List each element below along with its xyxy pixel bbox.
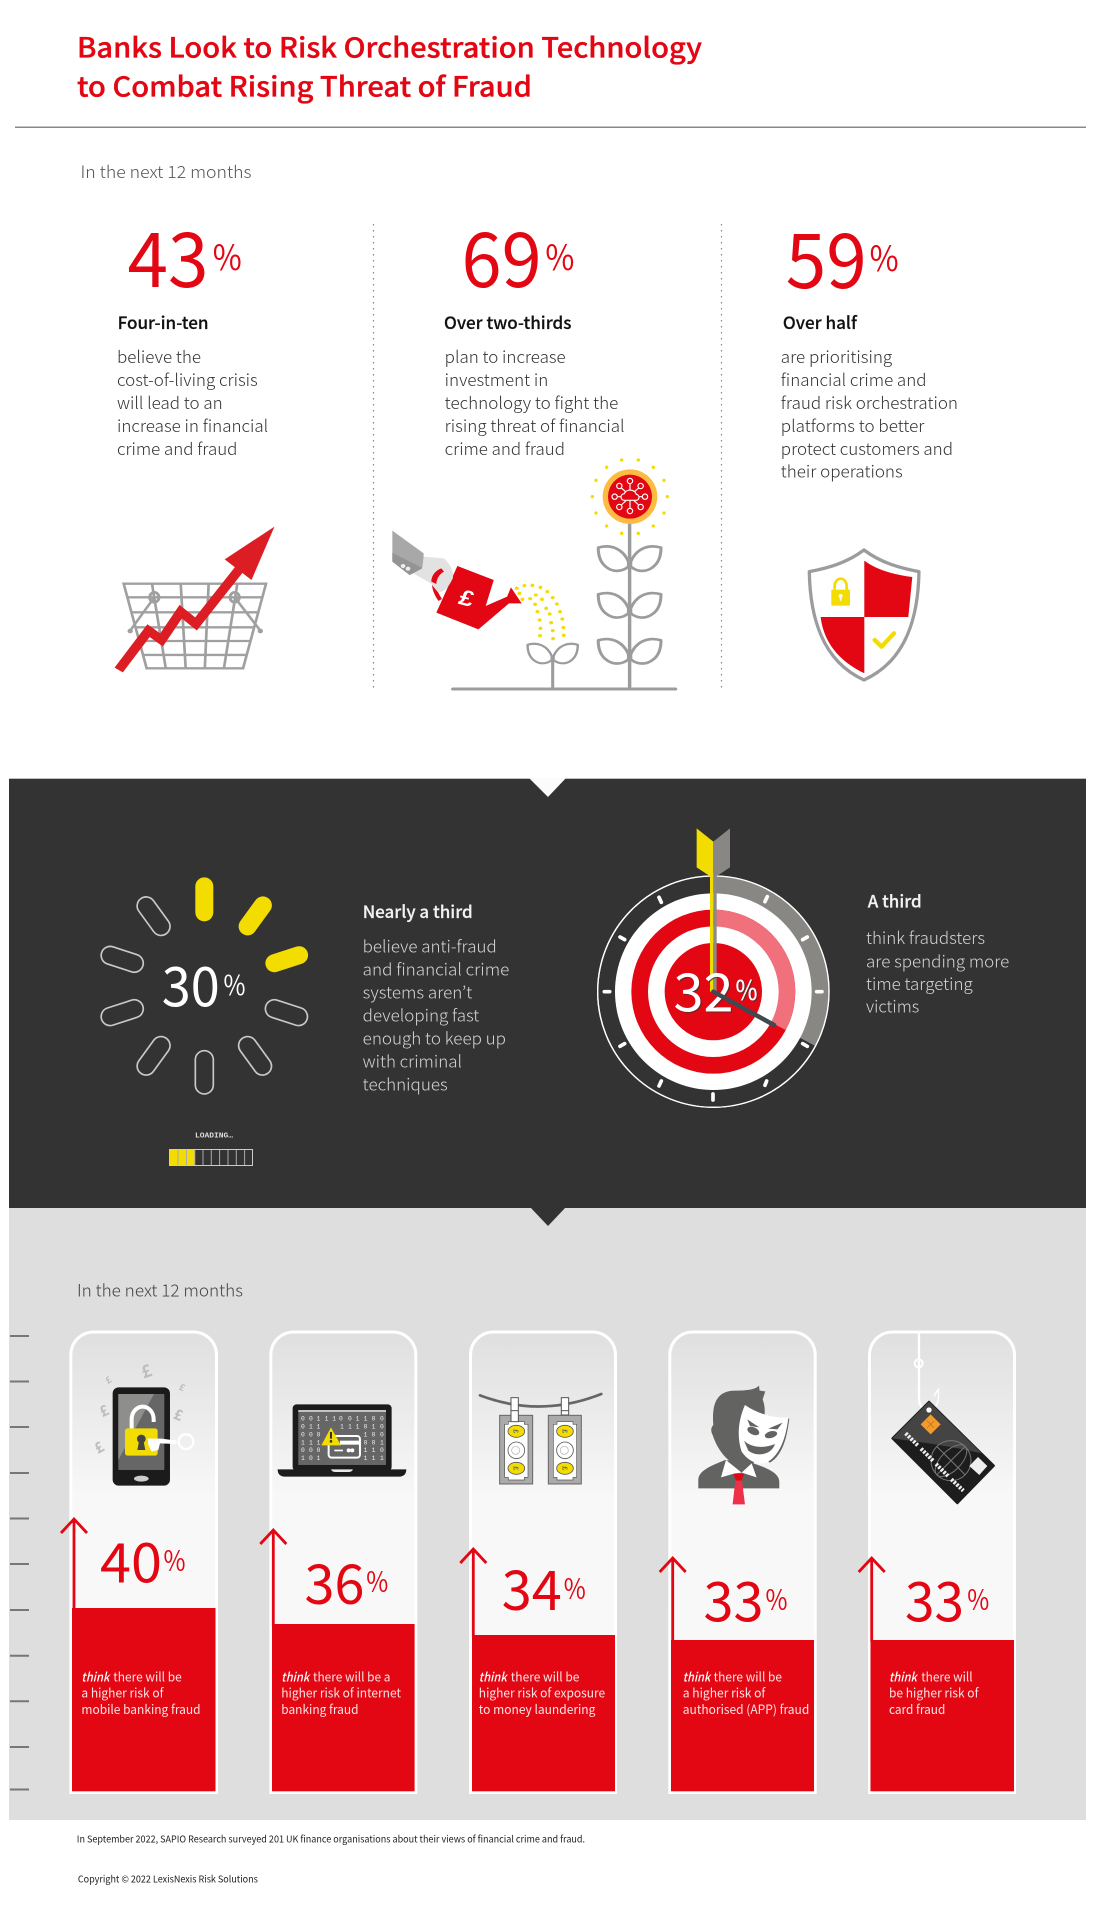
stat 36%: % xyxy=(366,1561,388,1600)
caption: a higher risk of xyxy=(683,1683,766,1702)
icon: laptop with binary and alert: 0 xyxy=(380,1416,384,1423)
caption xyxy=(281,1667,401,1718)
ground line xyxy=(453,684,676,693)
stat 59%: % xyxy=(870,231,899,282)
icon: laptop with binary and alert: 0 xyxy=(339,1416,343,1423)
icon: flower with network node head xyxy=(591,458,669,535)
panel: dark survey band xyxy=(9,778,1086,1226)
caption xyxy=(479,1667,605,1718)
red bar 33 percent xyxy=(870,1640,1014,1791)
caption: think xyxy=(479,1667,508,1686)
arrow up xyxy=(460,1549,486,1637)
panel: money laundering card xyxy=(460,1332,616,1792)
body text: and financial crime xyxy=(363,956,509,980)
red bar 36 percent xyxy=(272,1624,415,1791)
body text xyxy=(781,344,958,482)
icon: banknotes on washing line: £ xyxy=(560,1466,569,1470)
clock hand xyxy=(713,992,774,1025)
icon: laptop with binary and alert: 0 xyxy=(380,1424,384,1431)
icon: laptop with binary and alert: 1 xyxy=(317,1440,321,1447)
body text: with criminal xyxy=(363,1048,462,1072)
target dial chart with arrow xyxy=(598,828,829,1107)
body text: developing fast xyxy=(363,1002,479,1026)
icon: laptop with binary and alert: 0 xyxy=(348,1416,352,1423)
body text: time targeting xyxy=(866,971,973,995)
loading spinner chart xyxy=(99,877,310,1094)
icon: laptop with binary and alert: 1 xyxy=(356,1424,360,1431)
caption: higher risk of internet xyxy=(281,1683,401,1702)
caption: authorised (APP) fraud xyxy=(683,1699,809,1718)
loading bar: LOADING… xyxy=(195,1132,234,1140)
icon: laptop with binary and alert: 0 xyxy=(372,1440,376,1447)
body text: believe anti-fraud xyxy=(363,934,497,958)
icon: shopping basket with rising arrow xyxy=(119,527,274,670)
caption: there will xyxy=(921,1667,973,1686)
stat 69%: 69 xyxy=(462,199,542,309)
body text: fraud risk orchestration xyxy=(781,390,958,414)
section label: in the next 12 months (lower): In the next 12 months xyxy=(77,1277,243,1302)
icon: laptop with binary and alert: 1 xyxy=(309,1424,313,1431)
icon: laptop with binary and alert: 1 xyxy=(372,1455,376,1462)
icon: laptop with binary and alert: 0 xyxy=(301,1447,305,1454)
body text: platforms to better xyxy=(781,413,924,437)
body text: are spending more xyxy=(866,948,1009,972)
icon: banknotes on washing line xyxy=(480,1394,601,1484)
body text xyxy=(117,344,268,460)
stat 34%: 34 xyxy=(502,1546,562,1626)
title xyxy=(77,26,702,104)
icon: laptop with binary and alert: 1 xyxy=(380,1455,384,1462)
heading: a third: A third xyxy=(868,888,922,913)
stat 43%: 43 xyxy=(128,199,208,309)
body text: believe the xyxy=(117,344,201,368)
caption: think xyxy=(281,1667,311,1686)
icon: laptop with binary and alert: 1 xyxy=(372,1447,376,1454)
panel: over two-thirds stat xyxy=(392,199,676,689)
icon: phone with padlock and key: £ xyxy=(171,1403,186,1426)
progress wedge outer xyxy=(713,876,829,1046)
stat 40%: % xyxy=(164,1540,186,1579)
body text: investment in xyxy=(445,367,548,391)
stat 40%: 40 xyxy=(100,1519,162,1599)
icon: laptop with binary and alert: 0 xyxy=(317,1432,321,1439)
icon: laptop with binary and alert: 1 xyxy=(301,1440,305,1447)
panel: authorised APP fraud card xyxy=(660,1332,815,1792)
caption: think xyxy=(683,1667,712,1686)
caption: mobile banking fraud xyxy=(81,1699,201,1718)
panel: internet banking fraud card xyxy=(260,1332,416,1792)
stat 33%: % xyxy=(967,1578,989,1617)
stat 33%: 33 xyxy=(905,1558,964,1638)
icon: shield with padlock and tick xyxy=(809,550,919,680)
icon: laptop with binary and alert: 1 xyxy=(348,1424,352,1431)
body text: rising threat of financial xyxy=(445,413,625,437)
title: Banks Look to Risk Orchestration Technology xyxy=(77,26,702,66)
icon: laptop with binary and alert: 1 xyxy=(340,1424,344,1431)
red bar 40 percent xyxy=(72,1608,216,1791)
caption: be higher risk of xyxy=(889,1683,979,1702)
heading: over half: Over half xyxy=(783,309,858,334)
stat 43%: % xyxy=(213,230,242,281)
icon: laptop with binary and alert: 1 xyxy=(309,1440,313,1447)
caption: there will be xyxy=(714,1667,782,1686)
icon: phone with padlock and key: £ xyxy=(96,1399,113,1422)
panel: light grey bottom background xyxy=(9,1208,1086,1820)
body text: plan to increase xyxy=(445,344,566,368)
title: to Combat Rising Threat of Fraud xyxy=(77,64,532,104)
body text: victims xyxy=(866,994,919,1018)
sleeve and hand xyxy=(392,531,453,593)
section label: in the next 12 months: In the next 12 months xyxy=(80,158,252,183)
caption: higher risk of exposure xyxy=(479,1683,605,1702)
icon: laptop with binary and alert: 0 xyxy=(301,1432,305,1439)
icon: laptop with binary and alert: 0 xyxy=(317,1447,321,1454)
icon: bank card on fishing hook xyxy=(892,1333,994,1503)
body text: systems aren’t xyxy=(363,980,472,1004)
tall plant xyxy=(598,523,661,688)
icon: phone with padlock and key: £ xyxy=(137,1356,155,1383)
icon: laptop with binary and alert: 0 xyxy=(309,1432,313,1439)
body text xyxy=(445,344,625,460)
arrow up xyxy=(61,1519,87,1610)
icon: man holding mask xyxy=(698,1386,789,1504)
caption: think xyxy=(889,1667,919,1686)
stat 30%: % xyxy=(224,964,246,1003)
icon: laptop with binary and alert: 1 xyxy=(325,1416,329,1423)
loading bar xyxy=(170,1132,252,1166)
icon: laptop with binary and alert: 0 xyxy=(364,1440,368,1447)
icon: laptop with binary and alert: 0 xyxy=(309,1416,313,1423)
body text xyxy=(866,925,1009,1018)
stat 69%: % xyxy=(545,230,574,281)
body text: protect customers and xyxy=(781,436,953,460)
arrow up xyxy=(859,1558,885,1642)
stat 59%: 59 xyxy=(786,200,867,310)
caption: a higher risk of xyxy=(81,1683,164,1702)
panel: four-in-ten stat xyxy=(117,199,274,670)
heading: four-in-ten: Four-in-ten xyxy=(118,309,209,334)
panel: over half stat xyxy=(781,200,958,680)
panel: card fraud card xyxy=(859,1332,1014,1792)
stat 33%: % xyxy=(766,1578,788,1617)
caption: there will be a xyxy=(313,1667,390,1686)
stat 36%: 36 xyxy=(304,1540,364,1620)
body text: crime and fraud xyxy=(445,436,565,460)
icon: laptop with binary and alert: 1 xyxy=(332,1416,336,1423)
icon: laptop with binary and alert: 1 xyxy=(317,1455,321,1462)
stat 33%: 33 xyxy=(704,1558,764,1638)
icon: laptop with binary and alert: 0 xyxy=(301,1416,305,1423)
caption: to money laundering xyxy=(479,1699,595,1718)
icon: laptop with binary and alert xyxy=(278,1404,406,1477)
arrow up xyxy=(260,1530,286,1626)
body text: are prioritising xyxy=(781,344,892,368)
caption: banking fraud xyxy=(281,1699,358,1718)
icon: laptop with binary and alert: 1 xyxy=(356,1416,360,1423)
water droplets xyxy=(515,584,566,640)
icon: hand watering plants with pound can xyxy=(392,523,676,689)
caption xyxy=(889,1667,979,1718)
icon: phone with padlock and key xyxy=(90,1356,193,1486)
panel: mobile banking fraud card xyxy=(61,1332,216,1792)
icon: laptop with binary and alert: 0 xyxy=(309,1447,313,1454)
watering can: £ xyxy=(455,586,477,612)
red bar 33 percent xyxy=(671,1640,814,1791)
icon: laptop with binary and alert: 1 xyxy=(372,1424,376,1431)
icon: laptop with binary and alert: 1 xyxy=(364,1416,368,1423)
body text: technology to fight the xyxy=(445,390,618,414)
icon: phone with padlock and key: £ xyxy=(90,1436,108,1458)
heading: nearly a third: Nearly a third xyxy=(363,898,473,923)
icon: laptop with binary and alert: 1 xyxy=(364,1455,368,1462)
body text: increase in financial xyxy=(117,413,268,437)
icon: laptop with binary and alert: 0 xyxy=(301,1424,305,1431)
icon: banknotes on washing line: £ xyxy=(512,1466,521,1470)
arrow up xyxy=(660,1558,686,1642)
icon: laptop with binary and alert: 1 xyxy=(364,1432,368,1439)
body text: will lead to an xyxy=(117,390,223,414)
arrow xyxy=(697,828,730,992)
stat 32%: 32 xyxy=(674,952,734,1028)
body text: techniques xyxy=(363,1071,448,1095)
progress wedge inner xyxy=(713,910,795,1030)
body text: crime and fraud xyxy=(117,436,237,460)
body text: cost-of-living crisis xyxy=(117,367,258,391)
footnote: survey source: In September 2022, SAPIO Research surveyed 201 UK finance organisations about their views of financial crime and fraud. xyxy=(77,1832,585,1846)
watering can xyxy=(434,566,522,629)
icon: laptop with binary and alert: 0 xyxy=(372,1432,376,1439)
icon: laptop with binary and alert: 0 xyxy=(380,1447,384,1454)
icon: laptop with binary and alert: 1 xyxy=(317,1424,321,1431)
icon: laptop with binary and alert: 0 xyxy=(372,1416,376,1423)
body text: enough to keep up xyxy=(363,1026,506,1050)
icon: banknotes on washing line: £ xyxy=(512,1429,521,1433)
icon: laptop with binary and alert: 0 xyxy=(380,1432,384,1439)
caption: there will be xyxy=(511,1667,579,1686)
small plant xyxy=(528,644,578,688)
body text: think fraudsters xyxy=(866,925,985,949)
stat 32%: % xyxy=(736,969,758,1008)
body text xyxy=(363,934,509,1095)
heading: over two-thirds: Over two-thirds xyxy=(444,309,571,334)
caption: there will be xyxy=(113,1667,182,1686)
icon: banknotes on washing line: £ xyxy=(560,1429,569,1433)
body text: their operations xyxy=(781,458,903,482)
body text: financial crime and xyxy=(781,367,926,391)
caption xyxy=(81,1667,201,1718)
icon: phone with padlock and key: £ xyxy=(102,1372,114,1387)
caption: card fraud xyxy=(889,1699,945,1718)
stat 34%: % xyxy=(564,1567,586,1606)
caption xyxy=(683,1667,809,1718)
caption: think xyxy=(81,1667,111,1686)
footnote: copyright: Copyright © 2022 LexisNexis Risk Solutions xyxy=(78,1871,258,1885)
red bar 34 percent xyxy=(472,1635,615,1791)
icon: laptop with binary and alert: 1 xyxy=(364,1447,368,1454)
icon: laptop with binary and alert: 0 xyxy=(364,1424,368,1431)
icon: laptop with binary and alert: 1 xyxy=(301,1455,305,1462)
icon: phone with padlock and key: £ xyxy=(177,1379,188,1394)
stat 30%: 30 xyxy=(162,943,220,1023)
icon: laptop with binary and alert: 0 xyxy=(309,1455,313,1462)
icon: laptop with binary and alert: 1 xyxy=(317,1416,321,1423)
icon: laptop with binary and alert: 1 xyxy=(380,1440,384,1447)
